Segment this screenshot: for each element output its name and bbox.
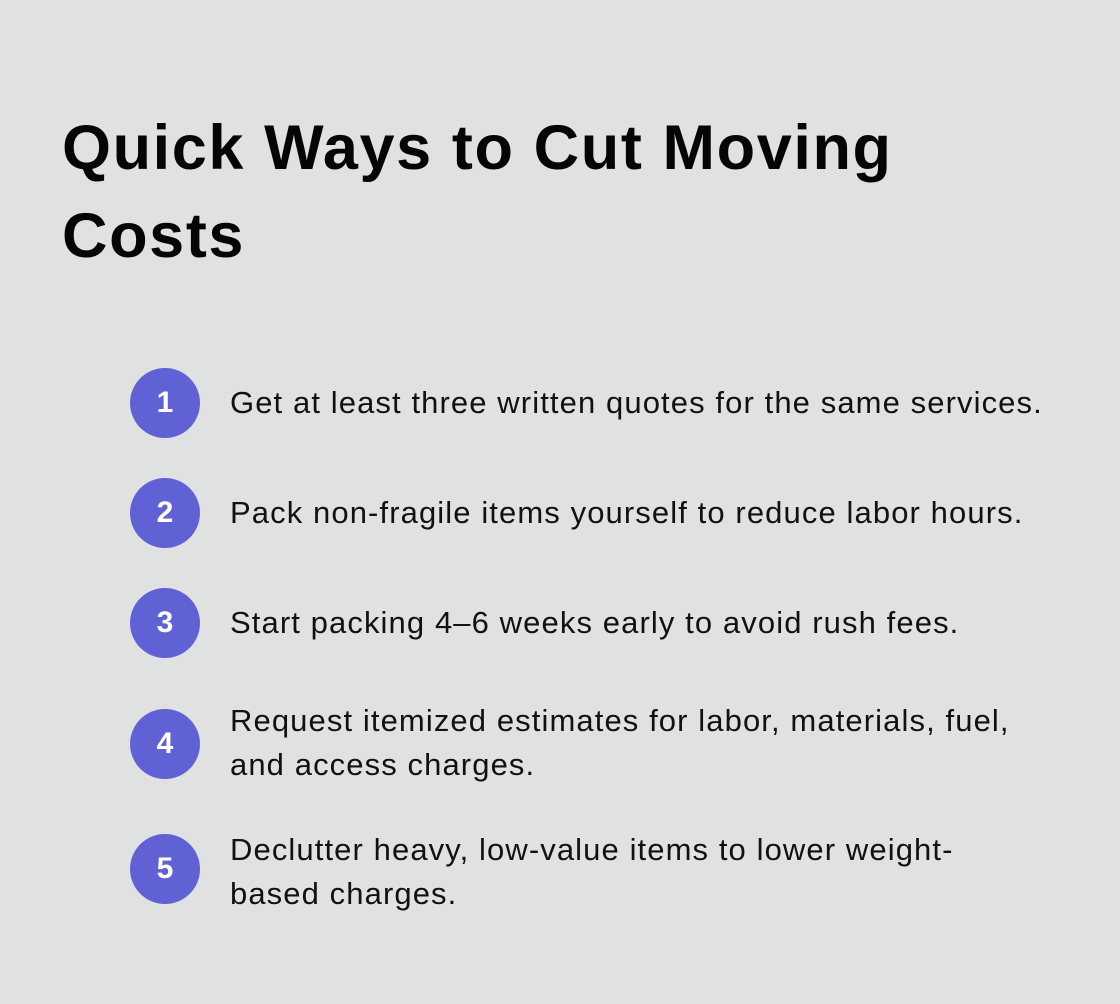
badge 1: 1 xyxy=(157,386,173,419)
item 1 xyxy=(130,368,1043,438)
badge 4 xyxy=(130,709,200,779)
text 3: Start packing 4–6 weeks early to avoid rush fees. xyxy=(230,605,959,640)
text 1: Get at least three written quotes for the same services. xyxy=(230,385,1043,420)
title: Quick Ways to Cut Moving xyxy=(62,113,893,183)
text 5 xyxy=(230,832,954,911)
badge 2: 2 xyxy=(157,496,173,529)
badge 3 xyxy=(130,588,200,658)
badge 1 xyxy=(130,368,200,438)
badge 3: 3 xyxy=(157,606,173,639)
title: Costs xyxy=(62,201,245,271)
badge 5 xyxy=(130,834,200,904)
item 5 xyxy=(130,832,954,911)
badge 5: 5 xyxy=(157,852,173,885)
item 3 xyxy=(130,588,959,658)
title xyxy=(62,113,893,271)
badge 4: 4 xyxy=(157,727,173,760)
item 2 xyxy=(130,478,1023,548)
text 2: Pack non-fragile items yourself to reduce labor hours. xyxy=(230,495,1023,530)
badge 2 xyxy=(130,478,200,548)
text 4 xyxy=(230,703,1010,782)
text 4: Request itemized estimates for labor, materials, fuel, xyxy=(230,703,1010,738)
text 4: and access charges. xyxy=(230,747,535,782)
text 5: based charges. xyxy=(230,876,457,911)
text 5: Declutter heavy, low-value items to lower weight- xyxy=(230,832,954,867)
item 4 xyxy=(130,703,1010,782)
